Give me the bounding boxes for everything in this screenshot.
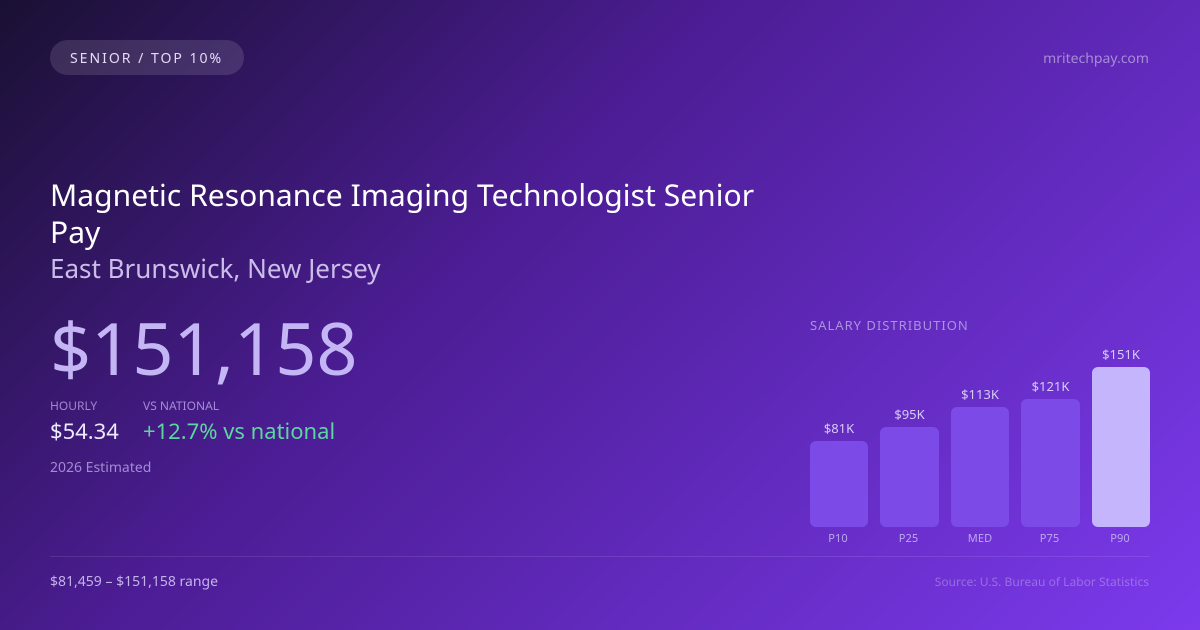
bar: P75: [1021, 377, 1080, 546]
badge: senior / top 10%: [50, 40, 244, 75]
vs national value: +12.7% vs national: [143, 416, 335, 446]
chart heading: SALARY DISTRIBUTION: [810, 316, 969, 334]
P10 bar: [810, 441, 868, 527]
P25 bar: [880, 427, 939, 527]
title: Pay: [50, 211, 100, 252]
bar: P90: [1092, 345, 1150, 546]
hourly label: HOURLY: [50, 397, 97, 414]
P75 value: $121K: [1032, 377, 1069, 395]
P10 label: P10: [828, 531, 848, 546]
P90 label: P90: [1110, 531, 1130, 546]
P25 label: P25: [899, 531, 918, 546]
estimate note: 2026 Estimated: [50, 458, 151, 477]
bar: median: [951, 385, 1009, 546]
P90 value: $151K: [1102, 345, 1140, 363]
median label: MED: [968, 531, 992, 546]
headline salary: $151,158: [50, 299, 358, 397]
median bar: [951, 407, 1009, 527]
bar: P10: [810, 419, 868, 546]
P10 value: $81K: [824, 419, 854, 437]
P90 bar: [1092, 367, 1150, 527]
stat: vs national: [143, 397, 335, 446]
vs national label: VS NATIONAL: [143, 397, 219, 414]
title: [50, 174, 754, 252]
badge: senior / top 10%: SENIOR / TOP 10%: [70, 49, 223, 68]
title: Magnetic Resonance Imaging Technologist Senior: [50, 174, 754, 215]
source note: Source: U.S. Bureau of Labor Statistics: [935, 573, 1149, 590]
median value: $113K: [961, 385, 999, 403]
P75 bar: [1021, 399, 1080, 527]
salary range: $81,459 – $151,158 range: [50, 572, 218, 591]
bar: P25: [880, 405, 939, 546]
chart: salary distribution: [810, 316, 1150, 546]
stat: hourly: [50, 397, 119, 446]
subtitle: location: East Brunswick, New Jersey: [50, 250, 381, 286]
hourly value: $54.34: [50, 416, 119, 446]
P75 label: P75: [1040, 531, 1059, 546]
site name: mritechpay.com: [1043, 49, 1149, 68]
P25 value: $95K: [894, 405, 925, 423]
